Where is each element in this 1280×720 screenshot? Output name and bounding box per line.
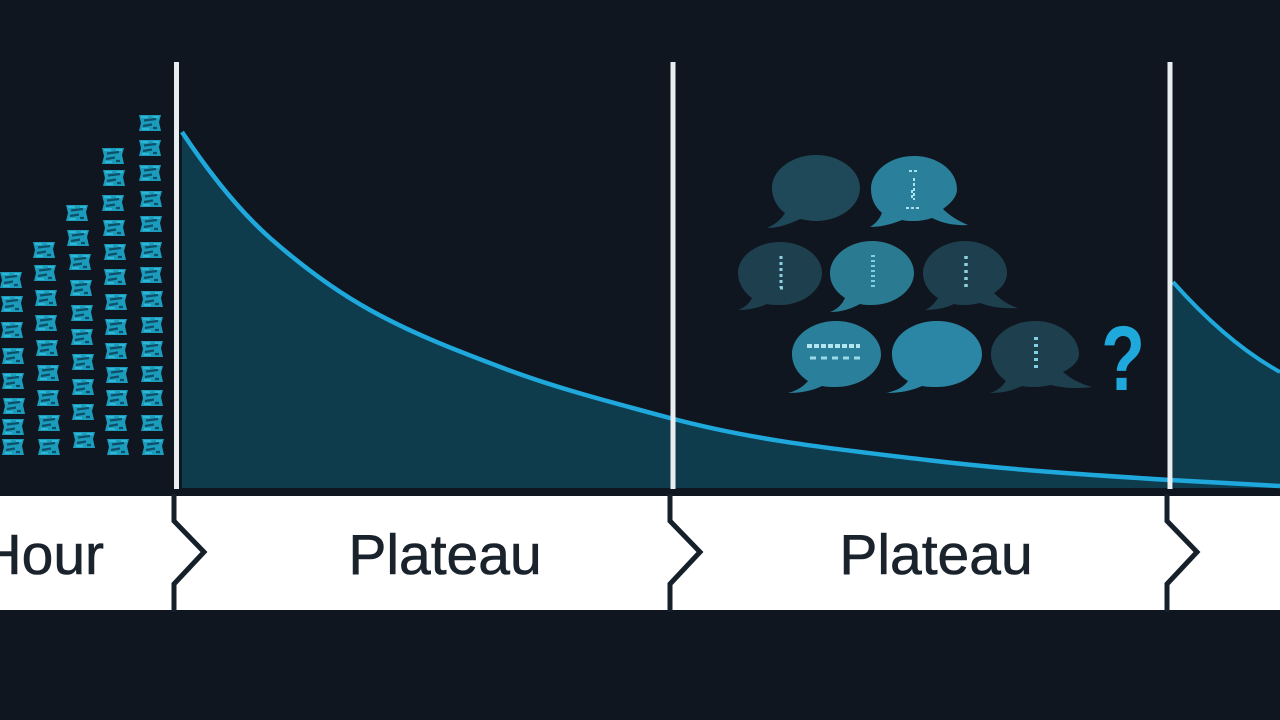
chevron divider 1 [174,494,204,612]
icon grid: rising message columns [0,115,164,455]
icon: question mark: ? [1101,307,1145,410]
label: Plateau second: Plateau [839,523,1033,587]
area chart: decay curve fill [182,132,1170,488]
curve line: second decay [1173,282,1280,372]
bubble row 1 [767,155,968,228]
bubble row 3 [788,321,1092,393]
area chart: second curve fill [1173,282,1280,488]
banner: timeline strip [0,494,1280,612]
curve line: main decay [182,132,1280,486]
speech bubble cluster [738,155,1145,410]
bubble row 2 [738,241,1018,312]
chevron divider 2 [670,494,700,612]
label: Plateau first: Plateau [348,523,542,587]
divider lines [174,62,1172,489]
chevron divider 3 [1167,494,1197,612]
